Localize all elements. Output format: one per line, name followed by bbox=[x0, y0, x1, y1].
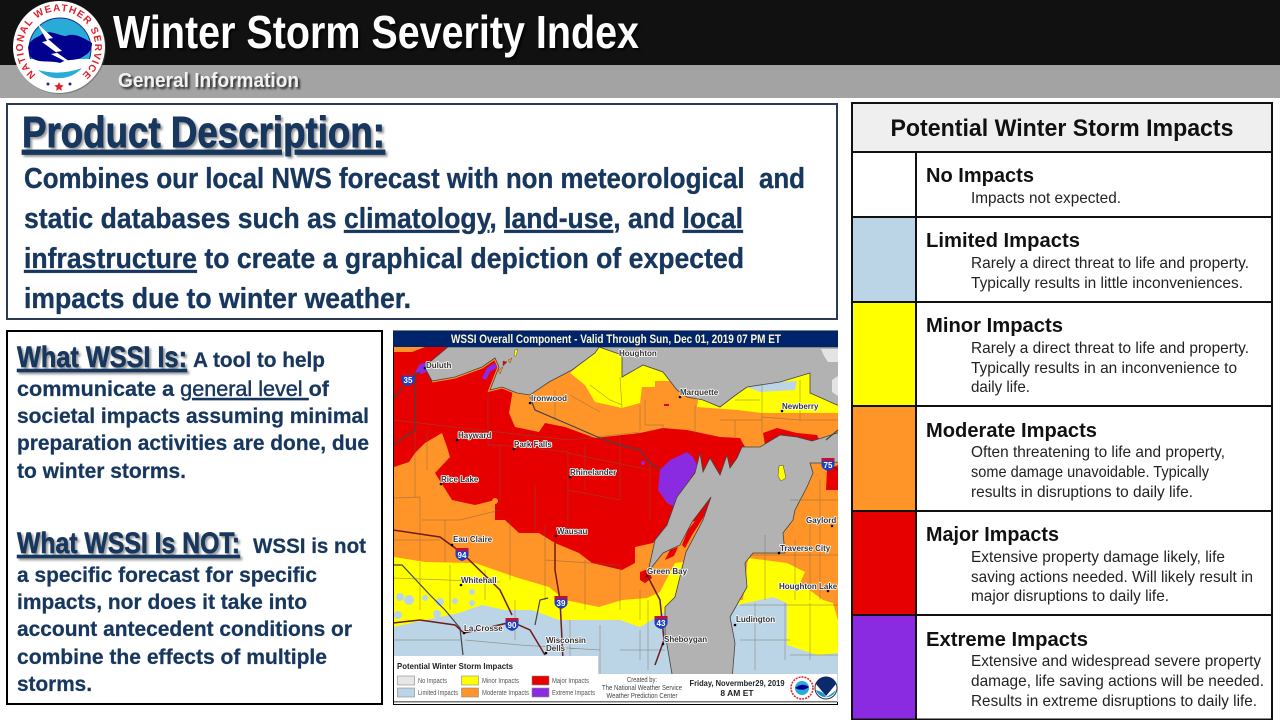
lake superior bbox=[425, 347, 840, 407]
header banner bbox=[0, 0, 1280, 98]
row: minor impacts: Rarely a direct threat to life and property. bbox=[971, 340, 1249, 357]
text block: description: infrastructure to create a graphical depiction of expected bbox=[24, 243, 744, 275]
text block: what WSSI is not: a specific forecast for specific bbox=[17, 564, 317, 587]
city labels: Traverse City bbox=[780, 544, 831, 553]
table header bbox=[852, 103, 1272, 152]
heading: product description: Product Description: bbox=[22, 108, 385, 157]
interstate shields bbox=[402, 373, 834, 631]
row: no impacts: Impacts not expected. bbox=[971, 190, 1121, 207]
row: moderate impacts: results in disruptions to daily life. bbox=[971, 484, 1193, 501]
city labels: Sheboygan bbox=[664, 635, 707, 644]
map legend: No Impacts bbox=[418, 678, 447, 685]
city labels: Houghton bbox=[619, 349, 657, 358]
city labels: Park Falls bbox=[514, 440, 552, 449]
row: minor impacts: Typically results in an inconvenience to bbox=[971, 360, 1237, 377]
row: major impacts: Extensive property damage likely, life bbox=[971, 549, 1225, 566]
title: Winter Storm Severity Index bbox=[113, 6, 639, 58]
lake michigan bbox=[648, 432, 840, 680]
islands bbox=[778, 465, 786, 481]
row: extreme impacts: Results in extreme disruptions to daily life. bbox=[971, 693, 1257, 710]
city labels: Rhinelander bbox=[570, 468, 616, 477]
text block: what WSSI is: A tool to help bbox=[193, 349, 325, 372]
row: no impacts bbox=[852, 152, 1121, 217]
city labels: Newberry bbox=[782, 402, 819, 411]
city labels: Ludington bbox=[736, 615, 775, 624]
row: moderate impacts: Often threatening to life and property, bbox=[971, 444, 1225, 461]
text block: what WSSI is not: WSSI is not bbox=[253, 535, 366, 558]
row: major impacts bbox=[852, 511, 1253, 615]
heading: what WSSI is: What WSSI Is: bbox=[17, 341, 187, 374]
interstate shields: 43 bbox=[657, 619, 666, 628]
table header: Potential Winter Storm Impacts bbox=[890, 115, 1234, 142]
interstate shields: 75 bbox=[824, 461, 833, 470]
text block: what WSSI is: communicate a general level of bbox=[17, 378, 330, 401]
map: WSSI overall component bbox=[393, 331, 840, 704]
text block: what WSSI is: preparation activities are done, due bbox=[17, 432, 369, 455]
row: extreme impacts: Extreme Impacts bbox=[926, 629, 1088, 651]
text block: what WSSI is not: combine the effects of multiple bbox=[17, 646, 327, 669]
text block: what WSSI is: to winter storms. bbox=[17, 460, 186, 483]
interstate shields: 39 bbox=[557, 599, 566, 608]
city labels: Houghton Lake bbox=[779, 582, 838, 591]
heading: what WSSI is not: What WSSI Is NOT: bbox=[17, 527, 240, 560]
map legend: Potential Winter Storm Impacts bbox=[397, 661, 513, 671]
city labels: Green Bay bbox=[647, 567, 688, 576]
row: limited impacts bbox=[852, 217, 1249, 302]
row: major impacts: major disruptions to daily life. bbox=[971, 588, 1169, 605]
icon: NOAA logo bbox=[815, 677, 837, 699]
row: minor impacts bbox=[852, 302, 1249, 406]
text block: what WSSI is not: impacts, nor does it take into bbox=[17, 591, 307, 614]
map credits: 8 AM ET bbox=[720, 688, 754, 698]
map credits bbox=[598, 674, 837, 701]
text block: description: impacts due to winter weather. bbox=[24, 283, 411, 315]
map credits: Friday, Novermber29, 2019 bbox=[690, 678, 785, 688]
text block: what WSSI is not: storms. bbox=[17, 673, 92, 696]
icon: small NWS logo bbox=[791, 677, 813, 699]
row: extreme impacts bbox=[852, 615, 1264, 720]
map legend: Major Impacts bbox=[552, 678, 589, 685]
interstate highways bbox=[393, 463, 838, 665]
text block: what WSSI is not: account antecedent conditions or bbox=[17, 618, 352, 641]
row: moderate impacts: some damage unavoidable. Typically bbox=[971, 464, 1209, 481]
row: limited impacts: Rarely a direct threat to life and property. bbox=[971, 255, 1249, 272]
icon: National Weather Service logo: NATIONAL WEATHER SERVICE bbox=[16, 4, 102, 80]
city labels: Rice Lake bbox=[441, 475, 479, 484]
text block: what WSSI is bbox=[17, 349, 369, 483]
map legend bbox=[394, 656, 598, 701]
row: major impacts: saving actions needed. Will likely result in bbox=[971, 569, 1253, 586]
text block: what WSSI is not bbox=[17, 535, 366, 696]
map legend: Limited Impacts bbox=[418, 690, 458, 697]
text block: what WSSI is: societal impacts assuming minimal bbox=[17, 405, 369, 428]
door peninsula patches bbox=[682, 518, 703, 548]
row: moderate impacts bbox=[852, 406, 1225, 511]
subtitle: General Information bbox=[118, 70, 299, 92]
city labels: Dells bbox=[546, 644, 566, 653]
city labels bbox=[424, 349, 838, 654]
canada snow patches bbox=[821, 349, 838, 396]
map legend: Moderate Impacts bbox=[482, 690, 529, 697]
city labels: Marquette bbox=[680, 388, 719, 397]
map credits: Created by: bbox=[627, 677, 657, 684]
row: minor impacts: Minor Impacts bbox=[926, 315, 1063, 337]
city labels: Wausau bbox=[557, 527, 587, 536]
city labels: Gaylord bbox=[806, 516, 836, 525]
map title bar: WSSI Overall Component - Valid Through Sun, Dec 01, 2019 07 PM ET bbox=[451, 332, 782, 346]
row: extreme impacts: Extensive and widespread severe property bbox=[971, 653, 1261, 670]
panel: potential winter storm impacts table bbox=[851, 103, 1273, 720]
row: major impacts: Major Impacts bbox=[926, 524, 1059, 546]
city labels: Hayward bbox=[458, 431, 491, 440]
row: no impacts: No Impacts bbox=[926, 165, 1034, 187]
panel: product description bbox=[7, 104, 837, 319]
map: impact areas bbox=[393, 347, 840, 702]
map credits: Weather Prediction Center bbox=[606, 693, 678, 700]
map legend: Extreme Impacts bbox=[552, 690, 595, 697]
city labels: Whitehall bbox=[461, 576, 497, 585]
row: limited impacts: Typically results in little inconveniences. bbox=[971, 275, 1243, 292]
row: moderate impacts: Moderate Impacts bbox=[926, 420, 1097, 442]
city labels: La Crosse bbox=[464, 624, 503, 633]
city labels: Ironwood bbox=[531, 394, 567, 403]
row: extreme impacts: damage, life saving actions will be needed. bbox=[971, 673, 1264, 690]
row: limited impacts: Limited Impacts bbox=[926, 230, 1080, 252]
interstate shields: 90 bbox=[508, 621, 517, 630]
city labels: Wisconsin bbox=[546, 636, 586, 645]
interstate shields: 94 bbox=[458, 551, 467, 560]
panel: what WSSI is and is not bbox=[7, 331, 382, 704]
map credits: The National Weather Service bbox=[602, 685, 682, 692]
state borders and rivers bbox=[393, 372, 838, 655]
text block: description: Combines our local NWS forecast with non meteorological and bbox=[24, 163, 805, 195]
map legend: Minor Impacts bbox=[482, 678, 519, 685]
county lines bbox=[393, 395, 665, 680]
text block: description: static databases such as climatology, land-use, and local bbox=[24, 203, 743, 235]
interstate shields: 35 bbox=[404, 376, 413, 385]
city labels: Eau Claire bbox=[453, 535, 493, 544]
row: minor impacts: daily life. bbox=[971, 379, 1030, 396]
city labels: Duluth bbox=[426, 361, 451, 370]
text block: description bbox=[24, 163, 805, 315]
